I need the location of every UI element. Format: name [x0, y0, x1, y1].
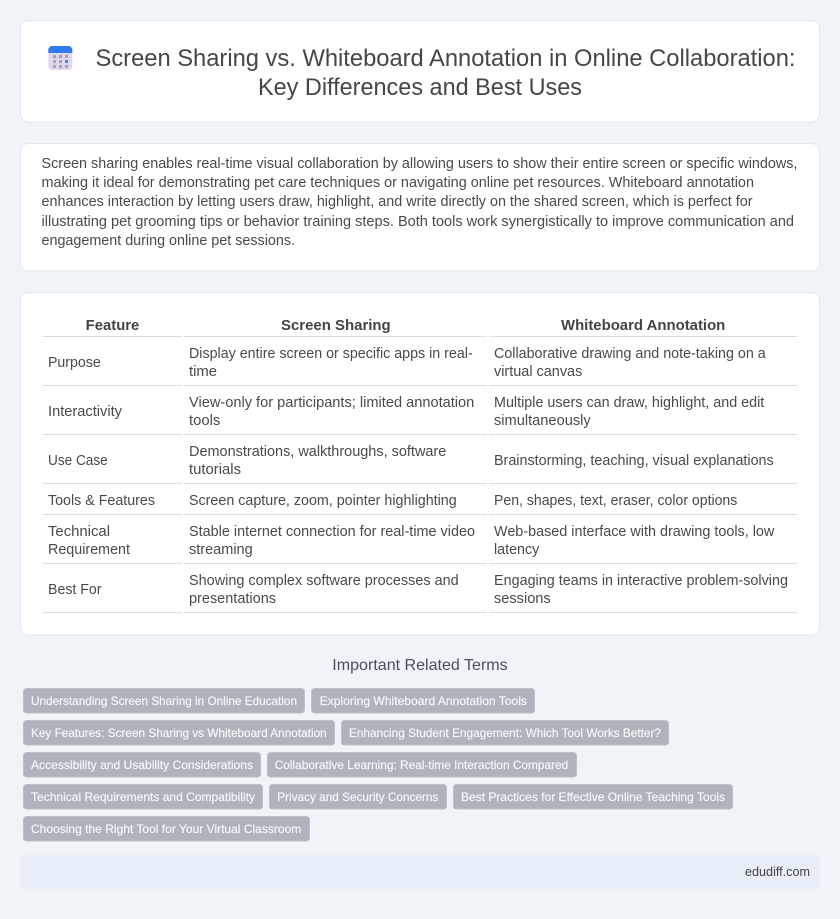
introduction text: making it ideal for demonstrating pet care techniques or navigating online pet resources. Whiteboard annotation: [42, 175, 754, 191]
icon: calendar: [48, 46, 72, 70]
tag: [270, 784, 446, 809]
row: best for: [48, 573, 788, 607]
introduction text: illustrating pet grooming tips or behavior training steps. Both tools work synergistically to improve communication and: [42, 214, 794, 230]
related term tags: [24, 688, 732, 841]
title: Key Differences and Best Uses: [258, 74, 582, 101]
tag: Exploring Whiteboard Annotation Tools: [320, 694, 527, 708]
row: tools and features: Tools & Features: [48, 493, 155, 509]
row: technical requirement: Stable internet connection for real-time video: [189, 524, 475, 540]
row: tools and features: Screen capture, zoom, pointer highlighting: [189, 493, 457, 509]
table header: Whiteboard Annotation: [561, 318, 725, 334]
tag: Collaborative Learning: Real-time Interaction Compared: [275, 758, 568, 772]
introduction text: [42, 156, 798, 249]
introduction text: engagement during online pet sessions.: [42, 233, 295, 249]
row: best for: presentations: [189, 591, 276, 607]
tag: Enhancing Student Engagement: Which Tool Works Better?: [349, 726, 661, 740]
tag: [24, 784, 262, 809]
tag: [312, 688, 534, 713]
row: interactivity: simultaneously: [494, 413, 592, 429]
tag: Choosing the Right Tool for Your Virtual Classroom: [31, 822, 301, 836]
table row lines: [43, 336, 797, 613]
footer bar: [20, 855, 820, 889]
row: technical requirement: [48, 524, 775, 558]
row: tools and features: Pen, shapes, text, eraser, color options: [494, 493, 737, 509]
tag: [454, 784, 732, 809]
row: interactivity: [48, 395, 764, 429]
row: best for: Engaging teams in interactive problem-solving: [494, 573, 788, 589]
row: best for: Showing complex software processes and: [189, 573, 459, 589]
row: interactivity: tools: [189, 413, 220, 429]
row: technical requirement: Requirement: [48, 542, 130, 558]
row: technical requirement: latency: [494, 542, 540, 558]
row: tools and features: [48, 493, 737, 509]
panel: comparison table card: [20, 292, 820, 635]
row: use case: Use Case: [48, 453, 108, 469]
comparison table: [43, 318, 797, 613]
introduction text: enhances interaction by letting users draw, highlight, and write directly on the shared screen, which is perfect for: [42, 194, 753, 210]
heading: important related terms: Important Related Terms: [332, 657, 508, 674]
row: purpose: virtual canvas: [494, 364, 582, 380]
panel: title card: [20, 20, 820, 122]
row: technical requirement: Technical: [48, 524, 110, 540]
table header: Screen Sharing: [281, 318, 391, 334]
row: interactivity: Interactivity: [48, 404, 123, 420]
tag: Best Practices for Effective Online Teaching Tools: [461, 790, 725, 804]
introduction text: Screen sharing enables real-time visual collaboration by allowing users to show their entire screen or specific windows,: [42, 156, 798, 172]
footer: source: edudiff.com: [745, 864, 810, 879]
row: use case: Demonstrations, walkthroughs, software: [189, 444, 446, 460]
tag: Technical Requirements and Compatibility: [31, 790, 255, 804]
tag: Key Features: Screen Sharing vs Whiteboard Annotation: [31, 726, 327, 740]
tag: [24, 720, 334, 745]
row: technical requirement: streaming: [189, 542, 253, 558]
row: purpose: [48, 346, 766, 380]
row: interactivity: Multiple users can draw, highlight, and edit: [494, 395, 764, 411]
title: Screen Sharing vs. Whiteboard Annotation in Online Collaboration:: [96, 45, 796, 72]
row: technical requirement: Web-based interface with drawing tools, low: [494, 524, 775, 540]
tag: Understanding Screen Sharing in Online Education: [31, 694, 297, 708]
row: use case: Brainstorming, teaching, visual explanations: [494, 453, 774, 469]
tag: [342, 720, 668, 745]
row: purpose: Purpose: [48, 355, 101, 371]
row: purpose: Collaborative drawing and note-taking on a: [494, 346, 766, 362]
tag: [24, 816, 310, 841]
row: use case: [48, 444, 774, 478]
row: best for: Best For: [48, 582, 102, 598]
table header: [86, 318, 725, 334]
tag: [24, 752, 260, 777]
panel: introduction card: [20, 144, 820, 271]
row: use case: tutorials: [189, 462, 241, 478]
table header: Feature: [86, 318, 139, 334]
tag: Accessibility and Usability Considerations: [31, 758, 253, 772]
row: interactivity: View-only for participants; limited annotation: [189, 395, 474, 411]
row: purpose: Display entire screen or specific apps in real-: [189, 346, 473, 362]
title: [96, 45, 796, 101]
row: best for: sessions: [494, 591, 551, 607]
tag: Privacy and Security Concerns: [277, 790, 438, 804]
tag: [268, 752, 576, 777]
tag: [24, 688, 304, 713]
row: purpose: time: [189, 364, 217, 380]
